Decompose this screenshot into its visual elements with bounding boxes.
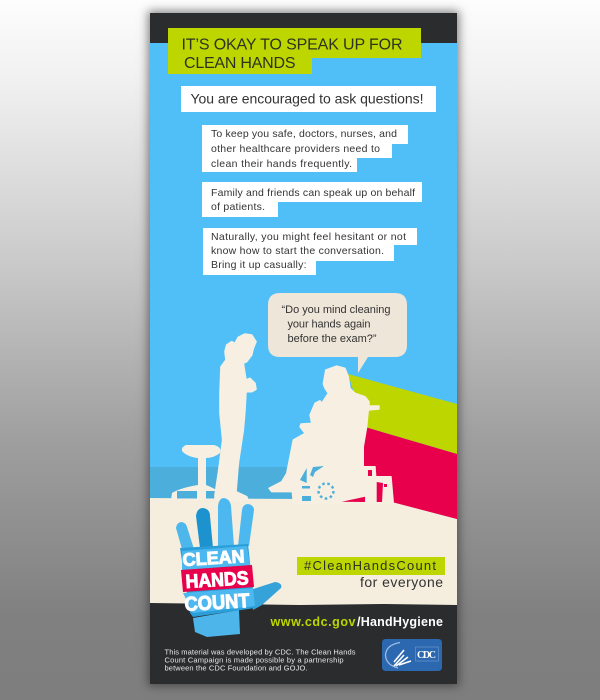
footer note: between the CDC Foundation and GOJO. bbox=[164, 664, 308, 672]
fingers bbox=[176, 498, 254, 549]
thumb bbox=[250, 582, 281, 610]
text block: naturally: Bring it up casually: bbox=[211, 259, 306, 271]
text block: naturally: Naturally, you might feel hesitant or not bbox=[211, 231, 406, 243]
count band: COUNT bbox=[184, 590, 250, 616]
hands band: HANDS bbox=[185, 568, 249, 593]
website url: www.cdc.gov bbox=[270, 615, 356, 629]
subheading: You are encouraged to ask questions! bbox=[190, 90, 424, 106]
hand logo bbox=[176, 498, 281, 637]
speech bubble: your hands again bbox=[288, 318, 370, 330]
text block: keep you safe: To keep you safe, doctors, nurses, and bbox=[211, 128, 397, 140]
speech bubble: “Do you mind cleaning bbox=[282, 304, 390, 316]
icon: HHS eagle bbox=[386, 642, 411, 668]
footer note bbox=[164, 648, 356, 672]
wrist bbox=[193, 610, 240, 637]
subheading bbox=[181, 86, 436, 112]
footer note: Count Campaign is made possible by a partnership bbox=[164, 656, 344, 664]
text block: naturally: know how to start the conversation. bbox=[211, 245, 384, 257]
speech bubble bbox=[268, 293, 407, 373]
footer note: This material was developed by CDC. The Clean Hands bbox=[164, 648, 356, 656]
palm bbox=[180, 544, 255, 617]
title: IT’S OKAY TO SPEAK UP FOR bbox=[182, 36, 402, 54]
poster background bbox=[150, 13, 457, 684]
website url: /HandHygiene bbox=[357, 615, 443, 629]
text block: keep you safe: other healthcare providers need to bbox=[211, 143, 380, 155]
website url bbox=[270, 615, 443, 629]
text block: keep you safe bbox=[202, 125, 408, 172]
title bbox=[168, 28, 421, 74]
red diagonal band bbox=[358, 427, 457, 519]
stool silhouette bbox=[171, 445, 220, 500]
CDC logo: CDC bbox=[417, 650, 436, 661]
text block: naturally bbox=[203, 228, 417, 275]
title: CLEAN HANDS bbox=[184, 55, 296, 72]
CDC logo bbox=[382, 639, 442, 671]
speech bubble: before the exam?” bbox=[288, 333, 377, 345]
clean band: CLEAN bbox=[182, 546, 245, 570]
green diagonal band bbox=[348, 374, 457, 454]
wheelchair wheel and gaps bbox=[300, 466, 387, 502]
text block: keep you safe: clean their hands frequently. bbox=[211, 158, 352, 170]
text block: family and friends bbox=[202, 182, 422, 217]
standing nurse silhouette bbox=[215, 334, 256, 500]
text block: family and friends: Family and friends can speak up on behalf bbox=[211, 187, 415, 199]
hashtag: #CleanHandsCount bbox=[304, 558, 436, 573]
text block: family and friends: of patients. bbox=[211, 201, 265, 213]
for everyone: for everyone bbox=[360, 574, 443, 590]
wheelchair patient silhouette bbox=[269, 366, 393, 503]
